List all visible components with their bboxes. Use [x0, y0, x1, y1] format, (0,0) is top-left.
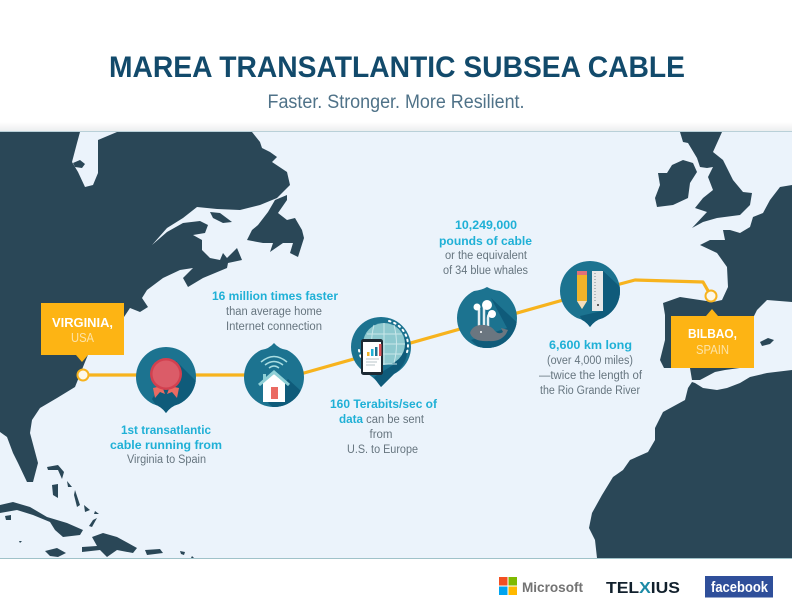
callout: Virginia: USA: [71, 330, 94, 345]
land: Greenland bay island: [73, 160, 85, 168]
text: 160 terabits: from: [370, 429, 392, 441]
land: North America: [0, 132, 290, 482]
subtitle: Faster. Stronger. More Resilient.: [268, 92, 524, 113]
map: [0, 122, 792, 559]
land: Anticosti island: [210, 212, 232, 223]
text: 6,600 km long: —twice the length of: [539, 370, 643, 382]
land: Ireland: [655, 160, 697, 207]
endpoint: Virginia: [78, 370, 88, 380]
land: Bahamas: [5, 465, 194, 558]
icon: whale pin: [457, 287, 517, 348]
text: 16 million times faster: [212, 289, 338, 333]
title: MAREA TRANSATLANTIC SUBSEA CABLE: [109, 51, 685, 84]
text: 6,600 km long: the Rio Grande River: [540, 385, 640, 397]
text: 6,600 km long: [539, 338, 643, 397]
text: 160 terabits: data can be sent: [339, 412, 425, 426]
logo: facebook: [705, 576, 773, 598]
text: first transatlantic: cable running from: [110, 438, 222, 452]
icon: globe and tablet pin: [351, 317, 411, 387]
cable route: [83, 280, 711, 375]
icon: ribbon seal pin: [136, 347, 196, 413]
logo: Telxius: TELXIUS: [606, 580, 680, 597]
text: pounds of cable: pounds of cable: [439, 234, 532, 248]
land: continental Europe: [660, 185, 792, 380]
land: Jamaica: [45, 548, 66, 557]
text: 160 terabits: U.S. to Europe: [347, 444, 418, 456]
endpoint: Bilbao: [706, 290, 716, 302]
icon: home wifi pin: [244, 343, 304, 407]
text: 16 million times faster: Internet connection: [226, 321, 322, 333]
logo: Microsoft: [499, 577, 583, 595]
land: Puerto Rico: [145, 549, 163, 555]
text: 6,600 km long: 6,600 km long: [549, 338, 632, 352]
text: pounds of cable: of 34 blue whales: [443, 265, 528, 277]
text: first transatlantic: 1st transatlantic: [121, 423, 211, 437]
callout: Bilbao: SPAIN: [696, 342, 729, 357]
icon: pencil and ruler pin: [560, 261, 620, 327]
text: 6,600 km long: (over 4,000 miles): [547, 355, 633, 367]
land: Great Britain: [680, 132, 752, 228]
text: 160 terabits: [330, 397, 438, 456]
land: Cuba: [0, 502, 83, 537]
text: pounds of cable: [439, 218, 532, 277]
text: 16 million times faster: than average home: [226, 306, 322, 318]
text: 16 million times faster: 16 million times faster: [212, 289, 338, 303]
text: 160 terabits: 160 Terabits/sec of: [330, 397, 438, 411]
text: first transatlantic: Virginia to Spain: [127, 454, 206, 466]
text: pounds of cable: 10,249,000: [455, 218, 517, 232]
callout: Bilbao: [671, 309, 754, 368]
logo: facebook: facebook: [711, 579, 769, 596]
land: Balearic islands: [760, 338, 774, 346]
callout: Virginia: [41, 303, 124, 362]
logo: Microsoft: Microsoft: [522, 579, 583, 595]
land: Hispaniola: [82, 533, 137, 557]
text: pounds of cable: or the equivalent: [445, 250, 528, 262]
callout: Virginia: VIRGINIA,: [52, 315, 113, 330]
land: Newfoundland: [247, 195, 304, 257]
text: first transatlantic: [110, 423, 222, 466]
callout: Bilbao: BILBAO,: [688, 326, 737, 341]
land: Africa: [589, 370, 792, 558]
